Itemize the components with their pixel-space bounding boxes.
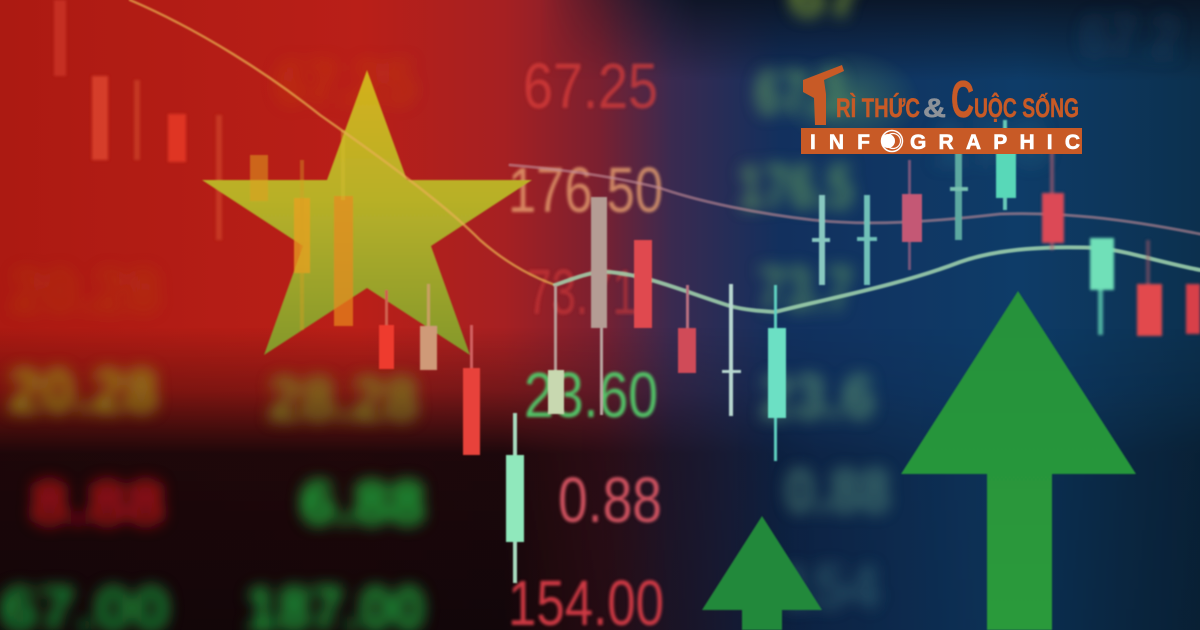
cyan candle [768,285,786,461]
logo backdrop glow [780,50,920,150]
main trend line falling on the left [130,0,555,285]
central candlesticks [506,197,786,583]
publisher logo [801,65,1082,154]
candle grey tall [591,197,607,415]
number 73.71: 73.71 [527,256,637,328]
green-white candle [506,413,524,583]
blurred background tickers: 67.25 [275,49,415,118]
number 67.25: 67.25 [523,50,658,122]
doji candle [722,284,741,416]
red candle right two [1137,240,1162,336]
blurred background tickers: 176 [930,110,1050,179]
small green arrow [702,516,822,630]
mint candle [1090,238,1114,335]
logo bar: INFOGRAPHIC: GRAPHIC [910,131,1080,154]
logo text: Trí thức & Cuộc sống: C [951,71,974,129]
blurred background tickers: 6.88 [300,469,425,538]
number 23.60: 23.60 [524,359,658,431]
logo bar: INFOGRAPHIC: INF [810,131,870,154]
logo: T mark [803,65,844,125]
doji right one [812,195,830,285]
blurred background tickers: 20.28 [8,357,158,426]
blurred red candles left [54,0,222,240]
red candle right one [1042,150,1064,250]
blurred background tickers: 28.28 [268,365,418,434]
candle grey wick with pale body [548,285,564,414]
red candle right three [1186,284,1200,334]
logo text: Trí thức & Cuộc sống [836,71,1079,129]
large green arrow [901,291,1136,630]
logo: O swirl mark [881,130,902,152]
upper faint trend line [510,165,1200,234]
star of the Vietnam flag [202,70,532,355]
trend lines [130,0,1200,312]
number 176.50: 176.50 [508,154,663,226]
blurred background tickers: 8.88 [30,469,165,538]
candle red tall [634,240,652,328]
right candlesticks [812,120,1200,336]
blurred background tickers: 73.7 [758,255,853,324]
doji right two [857,195,877,285]
bright teal candle [996,120,1016,210]
number 0.88: 0.88 [558,464,662,536]
teal wick candle [950,130,968,240]
candle red small [678,285,696,373]
main trend line rising on the right [555,247,1200,312]
blurred background tickers: 23.6 [760,363,875,432]
logo text: Trí thức & Cuộc sống: UỘC SỐNG [974,91,1079,123]
candles over star [250,130,480,455]
blurred background tickers: 0.88 [785,457,890,526]
blurred background tickers: 67.3 [755,59,845,128]
blurred background tickers: 67.2 [1080,3,1180,72]
price numbers [508,50,664,630]
blurred background tickers: 176.5 [738,153,853,222]
pink candle [902,160,922,270]
logo bar: INFOGRAPHIC [801,128,1082,154]
blurred background tickers: 154 [780,553,880,622]
logo text: Trí thức & Cuộc sống: & [923,93,946,123]
blurred background tickers: 20.28 [10,257,160,326]
logo text: Trí thức & Cuộc sống: RÌ THỨC [836,92,920,123]
